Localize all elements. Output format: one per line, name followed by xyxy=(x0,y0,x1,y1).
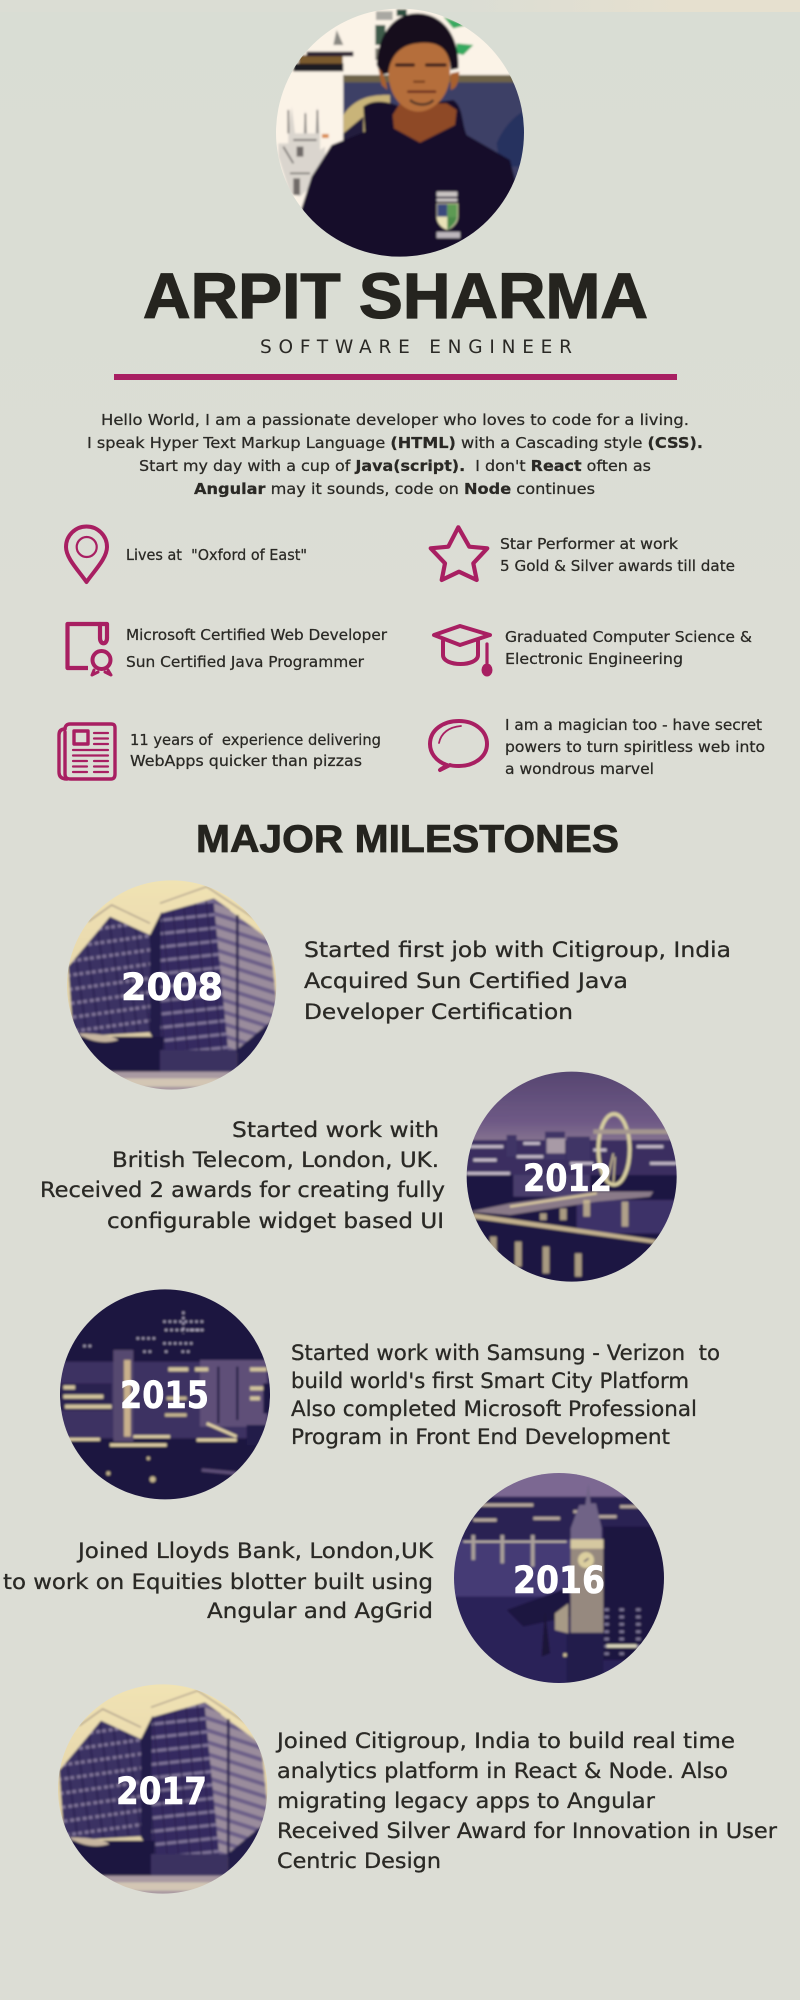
milestone text 2015: Also completed Microsoft Professional xyxy=(291,1397,697,1421)
fact: certifications xyxy=(126,626,388,671)
icon: star xyxy=(431,527,487,580)
milestone text 2016: to work on Equities blotter built using xyxy=(3,1570,433,1594)
fact: experience xyxy=(130,731,381,770)
photo: office building xyxy=(58,1684,268,1894)
milestone text 2012 xyxy=(40,1118,445,1233)
fact: experience: WebApps quicker than pizzas xyxy=(130,752,362,770)
milestone 2017 xyxy=(58,1684,778,1894)
fact: education: Electronic Engineering xyxy=(505,650,683,668)
fact: certifications: Microsoft Certified Web Developer xyxy=(126,626,388,644)
milestone text 2015: build world's first Smart City Platform xyxy=(291,1369,689,1393)
fact: magician xyxy=(505,716,765,778)
milestone 2016 xyxy=(3,1470,670,1690)
year 2008: 2008 xyxy=(121,966,223,1009)
milestone text 2015: Started work with Samsung - Verizon to xyxy=(291,1341,720,1365)
year 2012: 2012 xyxy=(523,1157,612,1200)
milestone text 2008 xyxy=(304,938,731,1024)
fact: awards: Star Performer at work xyxy=(500,535,678,553)
intro paragraph: Angular may it sounds, code on Node continues xyxy=(194,480,595,498)
fact: location: Lives at "Oxford of East" xyxy=(126,546,307,564)
icon: location pin xyxy=(66,526,107,582)
milestone text 2017: analytics platform in React & Node. Also xyxy=(277,1759,728,1783)
intro paragraph: Hello World, I am a passionate developer who loves to code for a living. xyxy=(101,411,689,429)
fact: experience: 11 years of experience delivering xyxy=(130,731,381,749)
milestone text 2008: Developer Certification xyxy=(304,1000,573,1024)
milestone text 2017: migrating legacy apps to Angular xyxy=(277,1789,655,1813)
milestone text 2008: Started first job with Citigroup, India xyxy=(304,938,731,962)
photo: city at night xyxy=(57,1287,277,1507)
fact: education: Graduated Computer Science & xyxy=(505,628,752,646)
year 2015: 2015 xyxy=(120,1374,209,1417)
profile photo xyxy=(276,8,524,257)
milestone text 2016: Joined Lloyds Bank, London,UK xyxy=(76,1539,434,1563)
photo: office building xyxy=(67,880,276,1090)
icon: graduation cap xyxy=(434,626,490,674)
icon: newspaper xyxy=(59,724,115,779)
milestone text 2012: Received 2 awards for creating fully xyxy=(40,1178,445,1202)
fact: certifications: Sun Certified Java Programmer xyxy=(126,653,365,671)
milestone text 2012: configurable widget based UI xyxy=(107,1209,444,1233)
intro paragraph xyxy=(87,411,703,498)
fact: magician: powers to turn spiritless web into xyxy=(505,738,765,756)
milestone text 2017 xyxy=(275,1729,777,1873)
milestone 2012 xyxy=(40,1067,683,1290)
milestone text 2015: Program in Front End Development xyxy=(291,1425,670,1449)
milestone text 2012: Started work with xyxy=(232,1118,439,1142)
fact: education xyxy=(505,628,752,668)
intro paragraph: I speak Hyper Text Markup Language (HTML) with a Cascading style (CSS). xyxy=(87,434,703,452)
photo: london skyline with wheel xyxy=(466,1072,677,1282)
milestone text 2017: Received Silver Award for Innovation in User xyxy=(277,1819,777,1843)
milestone text 2017: Centric Design xyxy=(277,1849,441,1873)
milestone text 2016 xyxy=(3,1539,434,1623)
section heading: major milestones: MAJOR MILESTONES xyxy=(196,818,619,861)
milestone text 2016: Angular and AgGrid xyxy=(207,1599,433,1623)
heading underline xyxy=(114,374,677,380)
milestone text 2015 xyxy=(291,1341,720,1449)
icon: speech bubble xyxy=(430,721,487,770)
fact: awards xyxy=(500,535,735,575)
icon: certificate xyxy=(68,624,111,675)
job title: SOFTWARE ENGINEER xyxy=(260,337,572,358)
milestone text 2012: British Telecom, London, UK. xyxy=(112,1148,439,1172)
year 2017: 2017 xyxy=(116,1770,207,1813)
photo: big ben xyxy=(450,1470,670,1690)
fact: magician: I am a magician too - have secret xyxy=(505,716,762,734)
milestone 2008 xyxy=(67,880,730,1090)
milestone 2015 xyxy=(57,1287,720,1507)
fact: magician: a wondrous marvel xyxy=(505,760,654,778)
fact: awards: 5 Gold & Silver awards till date xyxy=(500,557,735,575)
intro paragraph: Start my day with a cup of Java(script). I don't React often as xyxy=(139,457,651,475)
milestone text 2008: Acquired Sun Certified Java xyxy=(304,969,628,993)
name heading: ARPIT SHARMA xyxy=(143,260,648,332)
milestone text 2017: Joined Citigroup, India to build real time xyxy=(275,1729,735,1753)
year 2016: 2016 xyxy=(513,1559,605,1602)
